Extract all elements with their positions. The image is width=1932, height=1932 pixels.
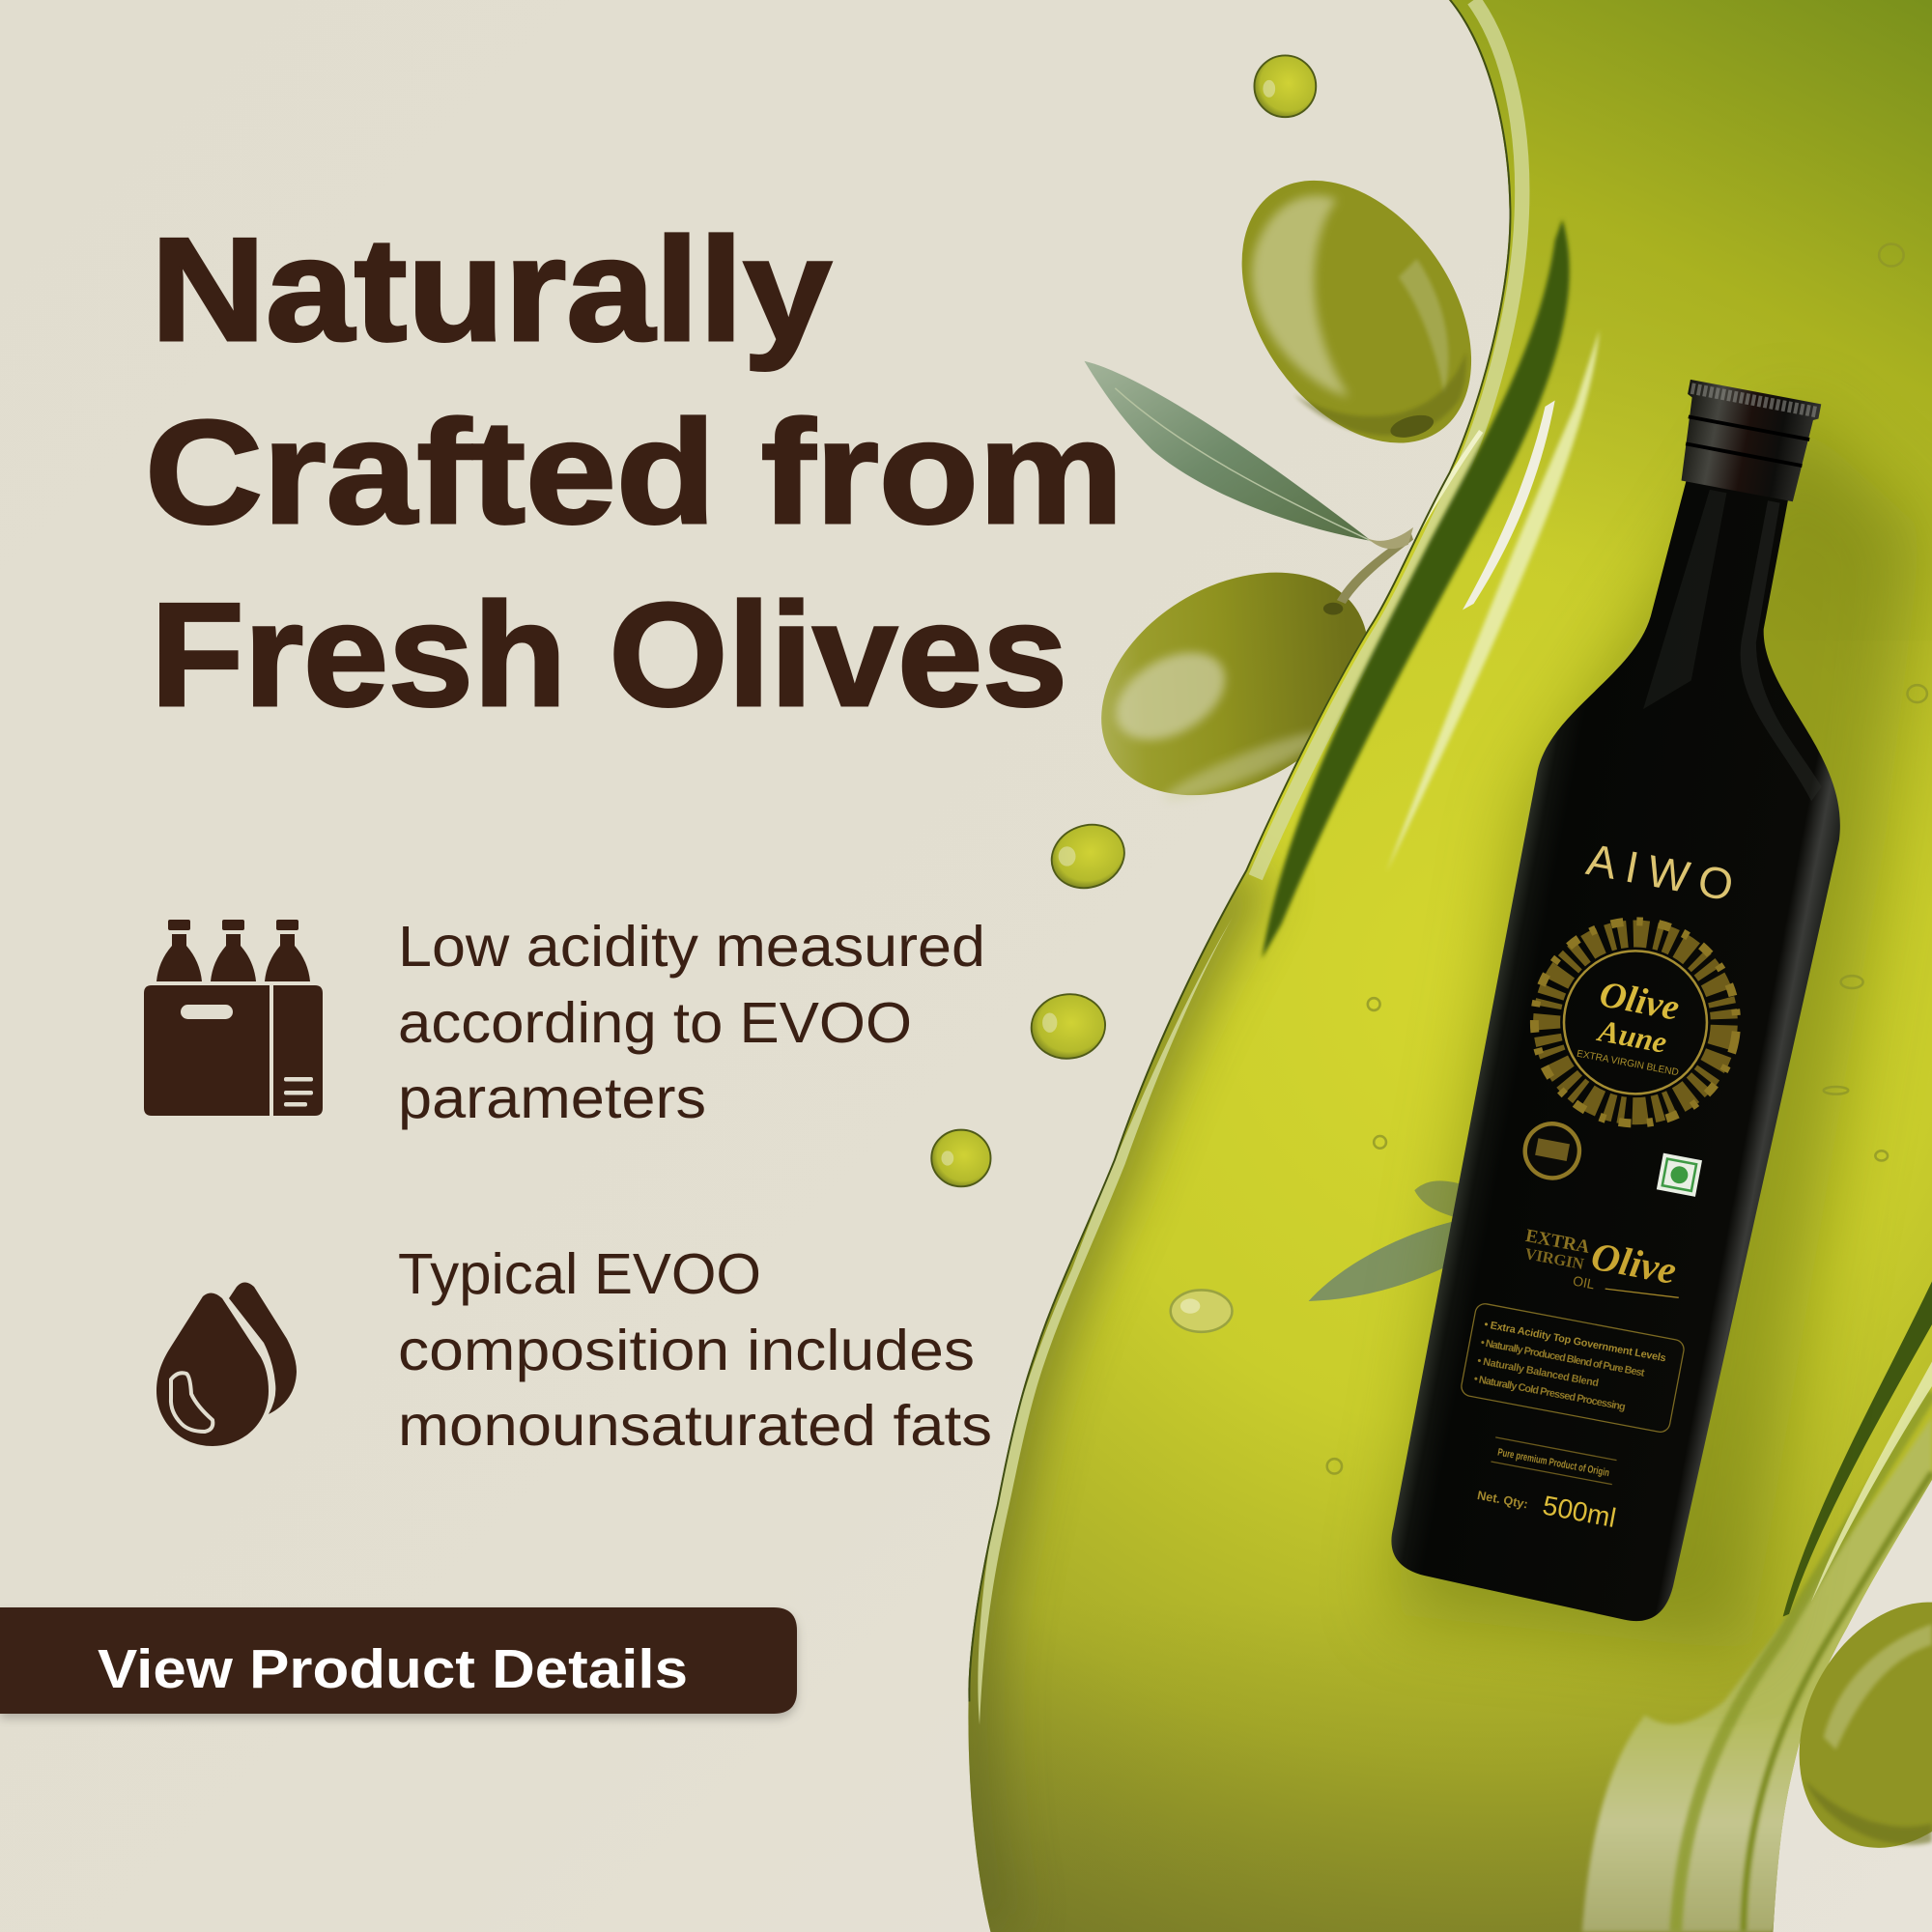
wreath emblem: Olive [1596, 974, 1683, 1029]
title: Crafted from [145, 390, 1123, 554]
product name [1518, 1221, 1688, 1308]
text: EVOO composition: monounsaturated fats [398, 1394, 992, 1458]
icon: oil drops [156, 1283, 297, 1446]
text: EVOO composition: composition includes [398, 1319, 975, 1382]
volume: Net. Qty: [1476, 1488, 1529, 1512]
wreath emblem [1518, 904, 1753, 1141]
thin sparkle [1408, 430, 1484, 553]
text: EVOO composition [398, 1242, 992, 1458]
text: low acidity: parameters [398, 1066, 706, 1130]
olive leaf [1084, 361, 1413, 549]
feature box: • Extra Acidity Top Government Levels [1483, 1319, 1667, 1364]
product name: VIRGIN [1523, 1244, 1585, 1273]
title: Naturally [151, 208, 832, 372]
text: low acidity: Low acidity measured [398, 915, 985, 979]
text: low acidity: according to EVOO [398, 991, 912, 1055]
origin line: Pure premium Product of Origin [1496, 1447, 1610, 1479]
wreath emblem: EXTRA VIRGIN BLEND [1576, 1049, 1680, 1078]
olive bottom right [1799, 1602, 1932, 1848]
tiny bubbles [1327, 244, 1927, 1474]
pale highlight streak [1386, 330, 1600, 872]
icon: bottle crate [144, 920, 323, 1116]
feature box [1460, 1302, 1686, 1434]
origin line [1491, 1437, 1617, 1485]
volume [1475, 1478, 1618, 1533]
olive behind oil [1101, 533, 1413, 802]
bottom-right pale stream [1582, 1282, 1932, 1932]
cream gap [1463, 401, 1555, 610]
illustration: olives, oil swirl and bottle [931, 0, 1932, 1932]
feature box: • Naturally Produced Blend of Pure Best [1480, 1337, 1646, 1379]
dark green streak [1262, 219, 1570, 958]
oil droplets [931, 55, 1316, 1186]
edge line [968, 0, 1510, 1701]
title: Fresh Olives [151, 573, 1067, 737]
bottle shadow [1392, 407, 1922, 1651]
product name: Olive [1588, 1235, 1680, 1293]
cap [1672, 380, 1821, 503]
droplet 4 [931, 1130, 991, 1186]
text: low acidity [398, 915, 985, 1130]
bottle body [1384, 462, 1900, 1632]
title [145, 208, 1123, 737]
oil swirl [961, 0, 1932, 1932]
droplet 2 [1051, 823, 1125, 889]
olive top [1242, 180, 1472, 442]
droplet 1 [1254, 55, 1316, 117]
volume: 500ml [1541, 1490, 1618, 1533]
wreath emblem: Aune [1594, 1013, 1669, 1060]
veg mark [1657, 1153, 1702, 1197]
upper glass rim band [1256, 0, 1522, 877]
product name: EXTRA [1524, 1226, 1591, 1258]
brand name: AIWO [1582, 834, 1747, 912]
text: EVOO composition: Typical EVOO [398, 1242, 761, 1306]
button: View Product Details [98, 1638, 688, 1700]
small leaf behind bottle [1309, 1180, 1466, 1301]
oil surface drop [1171, 1290, 1233, 1332]
button [0, 1607, 797, 1714]
lower rim sliver [978, 918, 1233, 1725]
neck sheen [1643, 485, 1726, 717]
quality seal [1520, 1120, 1584, 1182]
product name: OIL [1572, 1272, 1596, 1292]
feature box: • Naturally Cold Pressed Processing [1473, 1374, 1627, 1413]
bottle [1384, 365, 1918, 1632]
droplet 3 [1030, 993, 1106, 1060]
feature box: • Naturally Balanced Blend [1476, 1355, 1600, 1389]
